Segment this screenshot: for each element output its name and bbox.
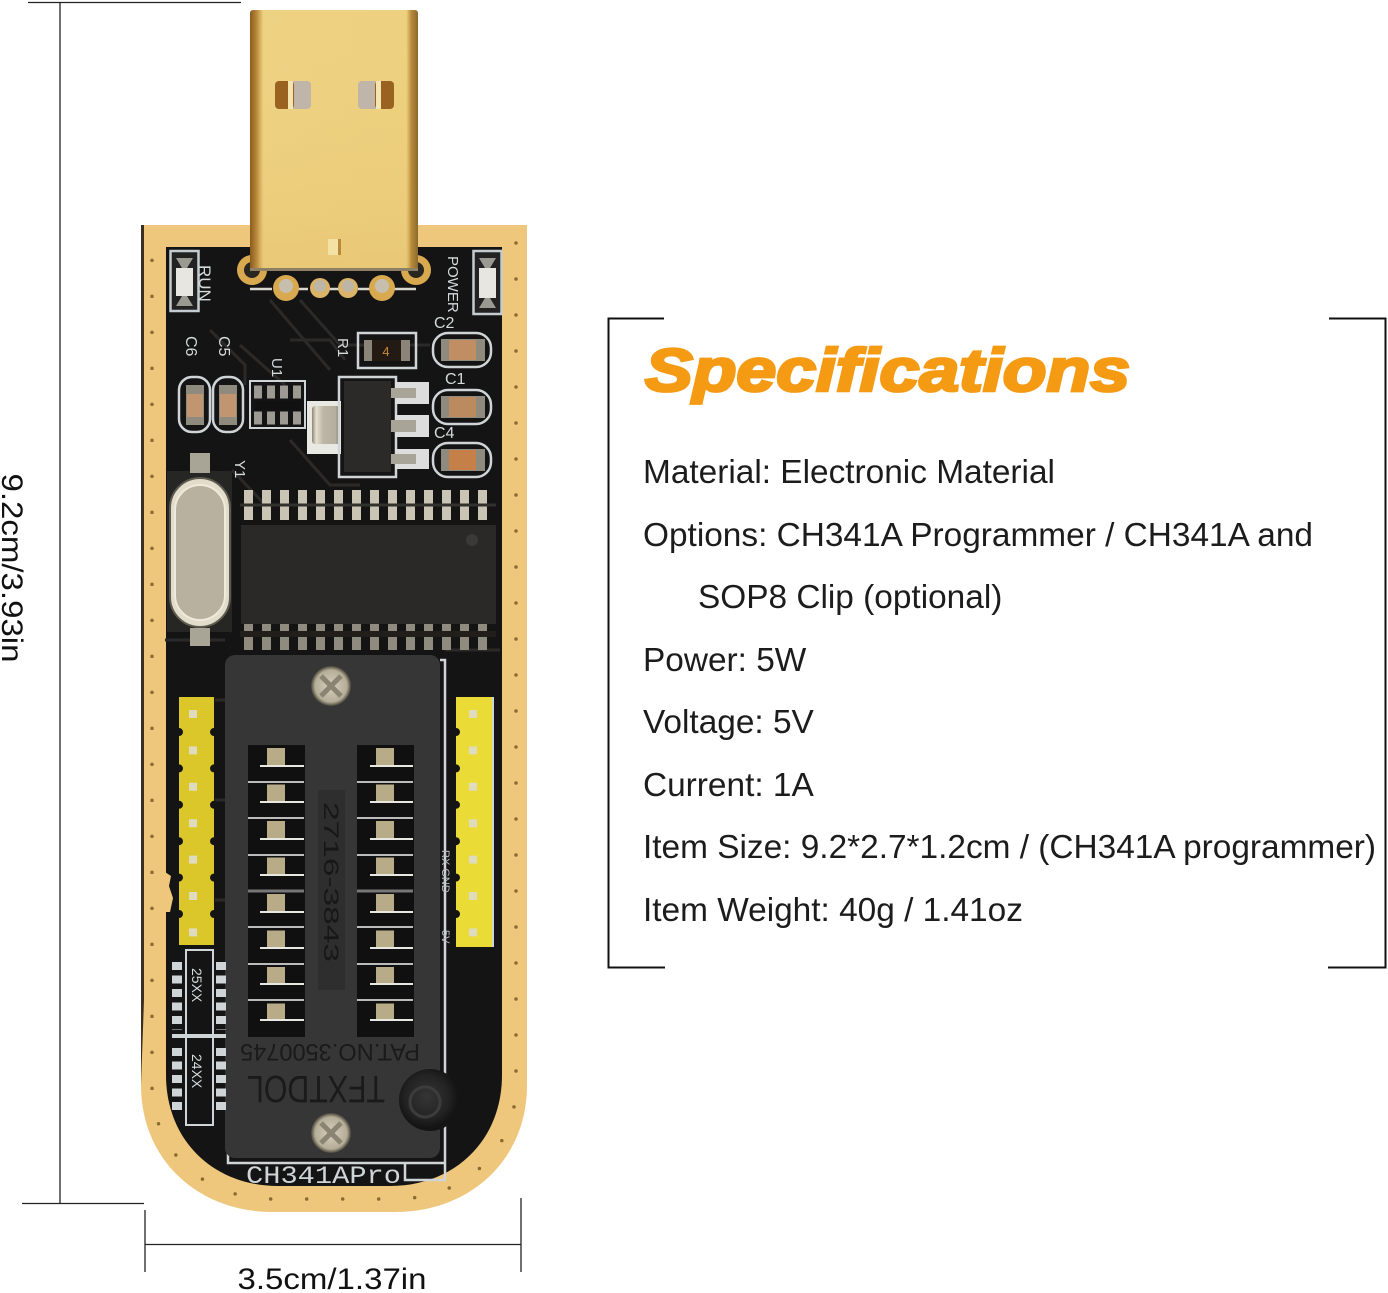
U1 chip footprint: U1 [268, 358, 285, 377]
socket right window [357, 745, 414, 1037]
25XX 24XX footprint [172, 950, 226, 1125]
25XX 24XX footprint: 24XX [189, 1054, 205, 1089]
gold notch on left edge [165, 872, 173, 912]
voltage regulator [307, 377, 429, 477]
capacitors C2 C1 C4 [433, 315, 491, 477]
spec: options continued: SOP8 Clip (optional) [698, 579, 1002, 616]
left bracket [608, 318, 665, 968]
heading: Specifications [645, 337, 1130, 404]
socket moulded text: TFXTDOL [247, 1067, 385, 1109]
R1 resistor [334, 333, 416, 368]
RUN LED: RUN [195, 265, 214, 302]
spec: material: Material: Electronic Material [643, 454, 1055, 491]
silk outline around socket [228, 660, 445, 1180]
right bracket [1328, 318, 1386, 968]
border via dots [152, 243, 516, 1199]
panel: specifications [608, 318, 1386, 968]
U1 chip footprint [250, 358, 305, 428]
25XX 24XX footprint: 25XX [189, 968, 205, 1003]
spec list [643, 454, 1376, 929]
socket part code [318, 790, 345, 990]
programmer board [141, 10, 527, 1212]
capacitors C6 C5: C6 [182, 336, 199, 357]
socket lever knob [399, 1069, 461, 1131]
spec: voltage: Voltage: 5V [643, 704, 815, 741]
bottom screw [311, 1113, 351, 1153]
board gold edge [141, 225, 527, 1212]
capacitors C6 C5: C5 [215, 336, 232, 357]
ZIF socket [225, 655, 440, 1158]
board model label: CH341APro [246, 1162, 401, 1191]
USB window right [358, 81, 394, 109]
POWER LED [444, 251, 502, 314]
spec: item weight: Item Weight: 40g / 1.41oz [643, 892, 1023, 929]
spec: current: Current: 1A [643, 767, 814, 804]
capacitors C2 C1 C4: C4 [434, 425, 455, 442]
POWER LED: POWER [444, 256, 461, 313]
USB solder pads [250, 275, 418, 301]
R1 resistor: R1 [334, 338, 351, 357]
USB window left [275, 81, 311, 109]
socket left window [248, 745, 305, 1037]
capacitors C2 C1 C4: C1 [445, 371, 466, 388]
left yellow pin header [179, 697, 214, 945]
R1 resistor: 4 [382, 344, 390, 359]
header silk labels [439, 850, 451, 944]
socket part code: 2716-3843 [319, 802, 342, 962]
copper traces [165, 300, 500, 900]
header silk labels: 5V [439, 930, 451, 944]
socket moulded text [240, 1038, 420, 1109]
main IC CH341A [240, 505, 496, 637]
crystal oscillator [167, 453, 248, 646]
capacitors C6 C5 [179, 336, 243, 432]
USB connector [237, 10, 431, 285]
spec: item size: Item Size: 9.2*2.7*1.2cm / (CH341A programmer) [643, 829, 1376, 866]
right yellow pin header [456, 697, 493, 947]
RUN LED [170, 251, 214, 311]
socket moulded text: PAT.NO.3500745 [240, 1038, 420, 1065]
header silk labels: RX GND [439, 850, 451, 893]
board black solder mask [166, 247, 502, 1186]
crystal oscillator: Y1 [231, 460, 248, 478]
top screw [311, 666, 351, 706]
capacitors C2 C1 C4: C2 [434, 315, 455, 332]
spec: power: Power: 5W [643, 642, 807, 679]
spec: options: Options: CH341A Programmer / CH341A and [643, 517, 1313, 554]
